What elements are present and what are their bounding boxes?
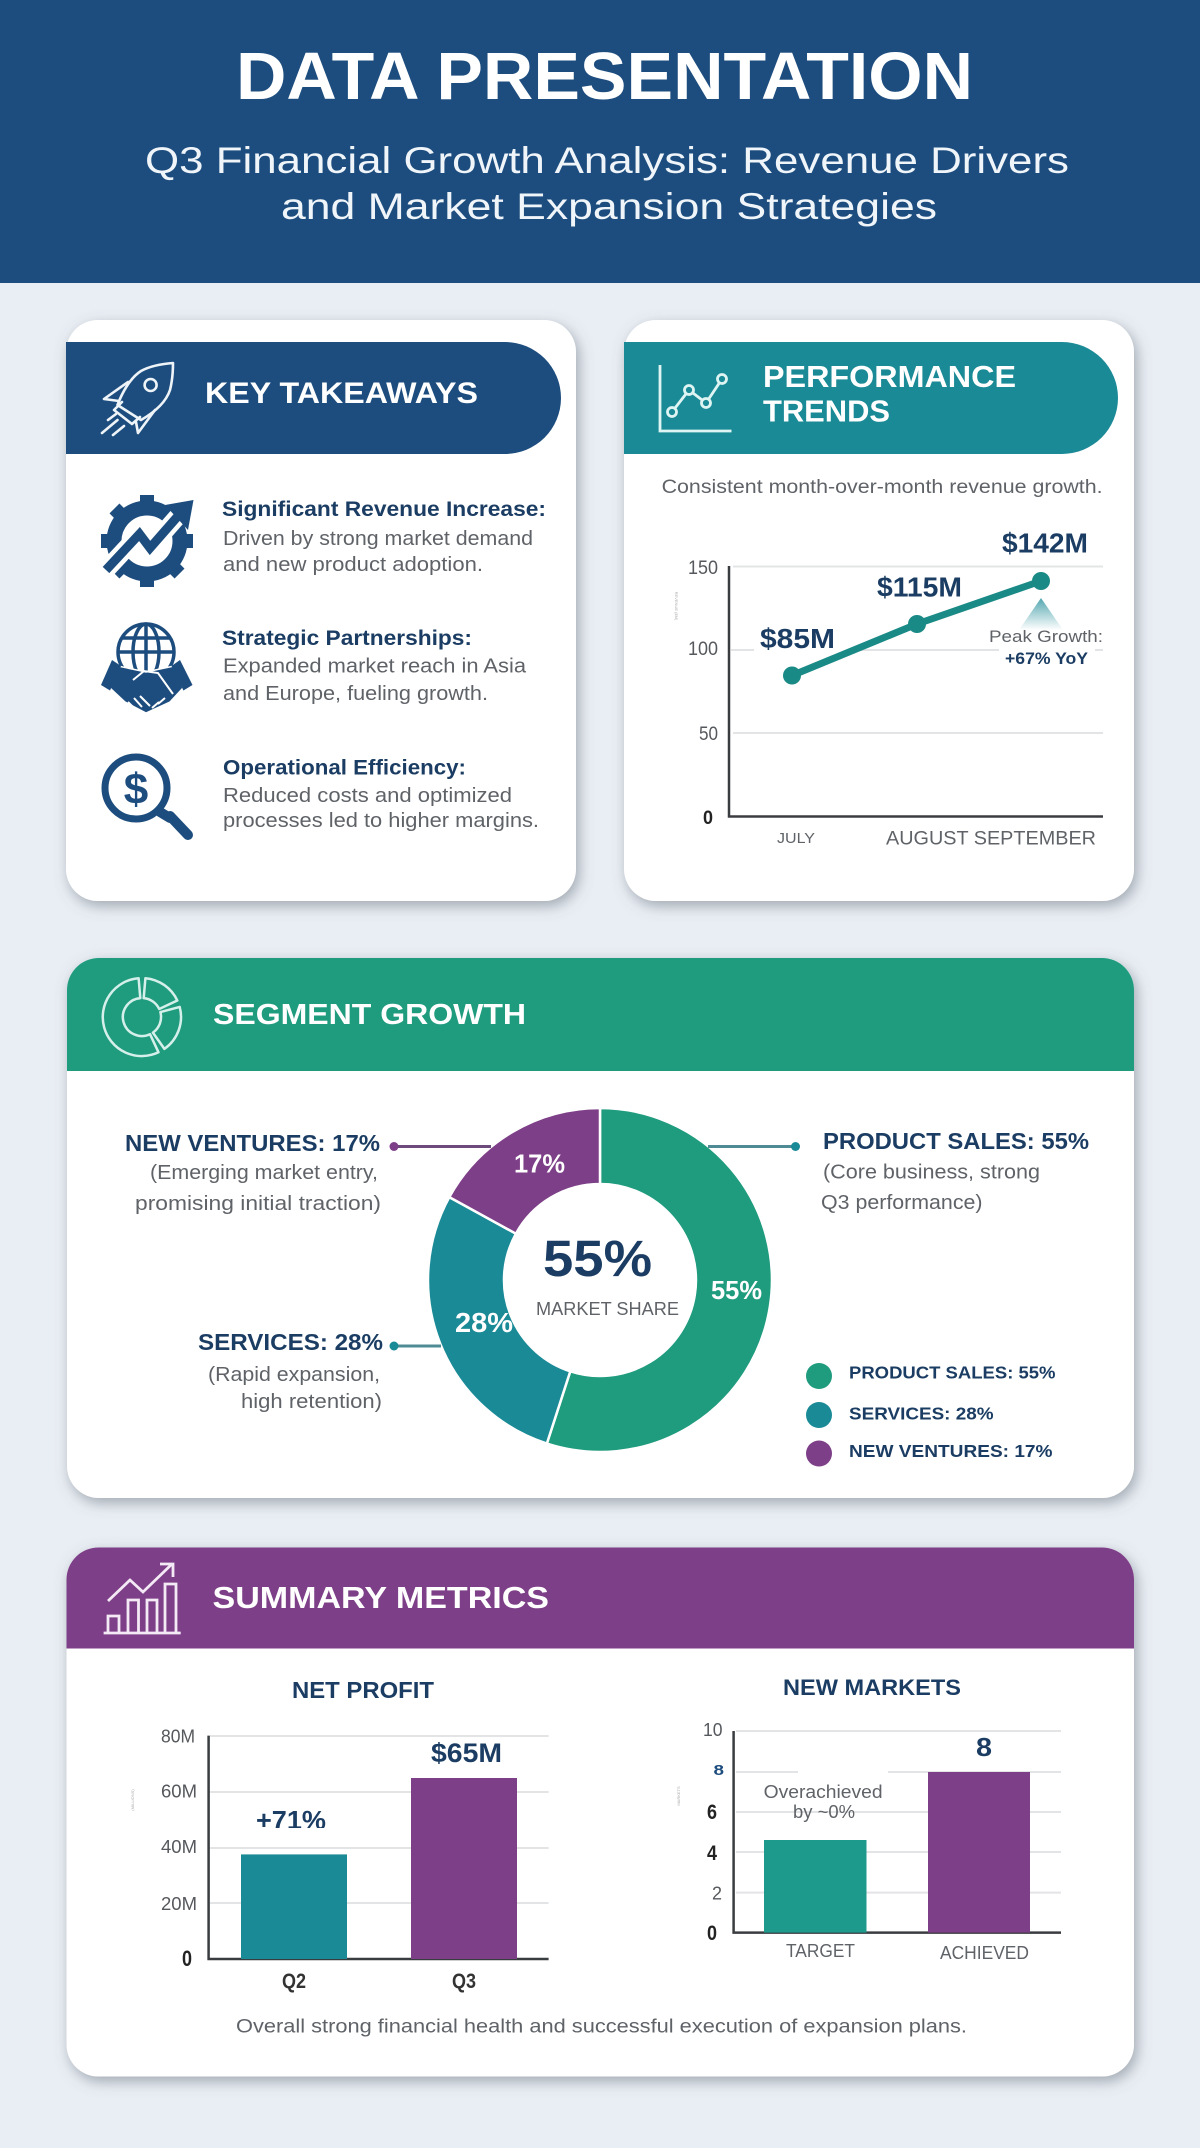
bar chart: new markets [676, 1675, 1061, 1963]
line chart: monthly revenue: Peak Growth: [989, 627, 1103, 646]
performance trends heading: PERFORMANCE [763, 359, 1016, 394]
takeaway: partnerships: Strategic Partnerships: [222, 627, 472, 650]
takeaway: partnerships: and Europe, fueling growth. [223, 683, 488, 705]
performance trends heading [763, 359, 1016, 428]
line chart: monthly revenue: 50 [699, 724, 718, 745]
bar chart: new markets: NEW MARKETS [783, 1675, 961, 1700]
bar chart: net profit: 20M [161, 1894, 197, 1914]
bar chart: net profit: 40M [161, 1837, 197, 1857]
bar chart: net profit: 80M [161, 1726, 195, 1746]
donut chart: 55% [543, 1230, 652, 1287]
legend: SERVICES: 28% [849, 1404, 994, 1424]
summary statement: Overall strong financial health and successful execution of expansion plans. [236, 2016, 967, 2037]
callout: services: SERVICES: 28% [198, 1329, 383, 1355]
key takeaways banner [66, 342, 561, 454]
line chart: monthly revenue: 150 [688, 558, 718, 579]
takeaway: revenue increase: Significant Revenue Increase: [222, 498, 546, 521]
bar chart: net profit: 60M [161, 1782, 197, 1802]
panel: summary metrics [66, 1548, 1134, 2076]
takeaway: efficiency: Reduced costs and optimized [223, 785, 512, 807]
takeaway: efficiency [223, 756, 539, 832]
trend description: Consistent month-over-month revenue growth. [662, 477, 1103, 498]
line chart: monthly revenue: $115M [877, 572, 962, 602]
callout: services: (Rapid expansion, [208, 1364, 380, 1386]
segment growth banner [67, 958, 1134, 1071]
bar chart: net profit [130, 1677, 549, 1993]
summary metrics banner [66, 1548, 1134, 1648]
bar chart: net profit: NET PROFIT [292, 1677, 434, 1703]
subtitle [145, 140, 1069, 227]
subtitle: and Market Expansion Strategies [281, 186, 937, 227]
bar chart: new markets: 0 [707, 1922, 717, 1945]
callout: new ventures: (Emerging market entry, [150, 1162, 378, 1184]
line chart: monthly revenue: +67% YoY [1005, 649, 1089, 668]
line chart: monthly revenue: JULY [777, 830, 815, 847]
takeaway: partnerships: Expanded market reach in Asia [223, 656, 527, 678]
icon: bars with arrow [104, 1564, 181, 1633]
panel: segment growth [67, 958, 1134, 1498]
bar chart: new markets: by ~0% [793, 1802, 855, 1822]
bar chart: net profit: Q2 [282, 1970, 306, 1993]
bar chart: new markets: 4 [707, 1842, 717, 1865]
line chart: monthly revenue: AUGUST SEPTEMBER [886, 828, 1096, 850]
segment growth heading: SEGMENT GROWTH [213, 999, 526, 1031]
takeaway: revenue increase: Driven by strong market demand [223, 528, 533, 550]
performance trends heading: TRENDS [763, 394, 890, 428]
takeaway: revenue increase [222, 498, 546, 576]
bar chart: new markets: ACHIEVED [940, 1943, 1029, 1963]
legend: NEW VENTURES: 17% [849, 1441, 1053, 1461]
header band [0, 0, 1200, 283]
bar chart: new markets: TARGET [786, 1941, 855, 1961]
callout: services [198, 1329, 441, 1413]
callout: new ventures: promising initial traction) [135, 1193, 381, 1215]
title: DATA PRESENTATION [236, 39, 973, 114]
line chart: monthly revenue: $85M [760, 623, 835, 654]
bar chart: net profit: (MILLIONS) [130, 1789, 135, 1811]
bar chart: net profit: +71% [256, 1805, 326, 1835]
bar chart: new markets: 8 [976, 1732, 992, 1762]
legend [806, 1362, 1056, 1466]
callout: product sales: PRODUCT SALES: 55% [823, 1128, 1089, 1154]
bar chart: net profit: $65M [431, 1738, 502, 1768]
icon: gear with growth arrow [101, 495, 194, 587]
takeaway: efficiency: Operational Efficiency: [223, 756, 466, 780]
bar chart: net profit: Q3 [452, 1970, 476, 1993]
callout: product sales: (Core business, strong [823, 1162, 1040, 1184]
bar chart: new markets: 8 [714, 1762, 724, 1779]
line chart: monthly revenue: $142M [1002, 528, 1088, 558]
summary metrics heading: SUMMARY METRICS [212, 1580, 549, 1615]
bar chart: net profit: 0 [182, 1946, 192, 1971]
icon: line chart [660, 365, 732, 431]
donut chart: 55% [711, 1275, 762, 1305]
line chart: monthly revenue: REVENUE ($M) [674, 592, 679, 621]
icon: magnifier with dollar: $ [124, 765, 148, 814]
subtitle: Q3 Financial Growth Analysis: Revenue Drivers [145, 140, 1069, 181]
performance trends banner [624, 342, 1118, 454]
icon: globe and handshake [101, 624, 192, 713]
callout: new ventures [125, 1130, 491, 1215]
takeaway: efficiency: processes led to higher margins. [223, 810, 539, 832]
icon: magnifier with dollar [105, 757, 188, 835]
line chart: monthly revenue [674, 528, 1103, 850]
donut chart: 17% [514, 1148, 565, 1178]
bar chart: new markets: MARKETS [676, 1786, 681, 1806]
bar chart: new markets: 2 [712, 1884, 722, 1904]
line chart: monthly revenue: 0 [703, 808, 713, 829]
callout: services: high retention) [241, 1391, 382, 1413]
bar chart: new markets: 10 [703, 1720, 722, 1740]
panel: performance trends [624, 320, 1134, 901]
donut chart [428, 1108, 772, 1452]
bar chart: new markets: 6 [707, 1801, 717, 1824]
donut chart: 28% [455, 1307, 513, 1338]
callout: product sales [708, 1128, 1089, 1214]
bar chart: new markets: Overachieved [764, 1782, 883, 1802]
callout: product sales: Q3 performance) [821, 1192, 982, 1214]
donut chart: MARKET SHARE [536, 1299, 679, 1319]
takeaway: partnerships [222, 627, 527, 705]
takeaway: revenue increase: and new product adoption. [223, 554, 483, 576]
line chart: monthly revenue: 100 [688, 639, 718, 660]
icon: rocket [102, 363, 173, 435]
callout: new ventures: NEW VENTURES: 17% [125, 1130, 380, 1156]
icon: pie chart [103, 978, 181, 1056]
legend: PRODUCT SALES: 55% [849, 1362, 1056, 1382]
panel: key takeaways [66, 320, 576, 901]
key takeaways heading: KEY TAKEAWAYS [205, 377, 478, 410]
